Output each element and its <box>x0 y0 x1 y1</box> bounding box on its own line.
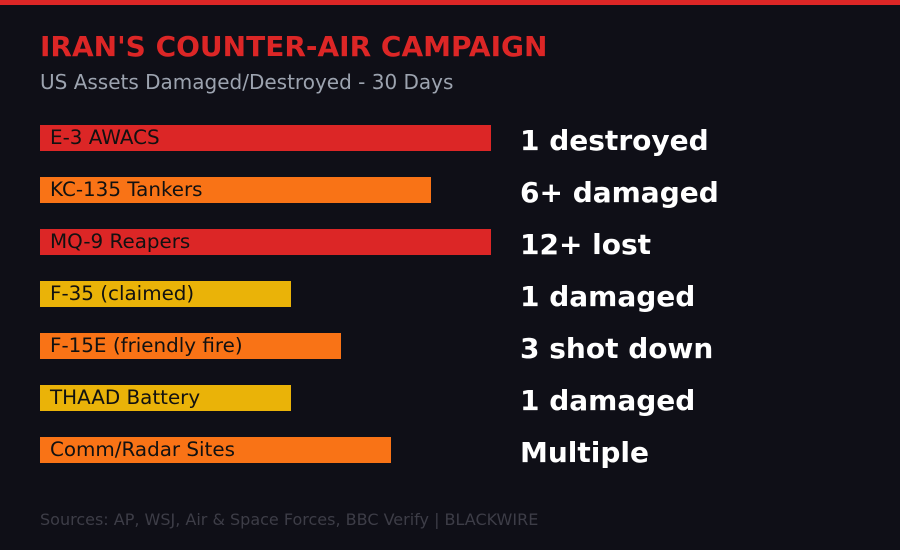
bar: Comm/Radar <box>40 437 391 463</box>
footer sources: Sources: AP, WSJ, Air & Space Forces, BBC Verify | BLACKWIRE <box>40 510 538 529</box>
bar: MQ-9: MQ-9 Reapers <box>50 230 190 253</box>
value: Multiple: Multiple <box>520 436 649 469</box>
bar: MQ-9 <box>40 229 491 255</box>
bar: THAAD <box>40 385 291 411</box>
bar: KC-135 <box>40 177 431 203</box>
value: 1 damaged: 1 damaged <box>520 384 695 417</box>
bar: F-15E <box>40 333 341 359</box>
value: 3 shot down: 3 shot down <box>520 332 713 365</box>
value: 6+ damaged: 6+ damaged <box>520 176 719 209</box>
value: 12+ lost: 12+ lost <box>520 228 651 261</box>
top accent bar <box>0 0 900 5</box>
bar: F-35 <box>40 281 291 307</box>
value: 1 destroyed: 1 destroyed <box>520 124 709 157</box>
bar: F-15E: F-15E (friendly fire) <box>50 334 243 357</box>
subtitle: US Assets Damaged/Destroyed - 30 Days <box>40 70 453 94</box>
bar: F-35: F-35 (claimed) <box>50 282 194 305</box>
bar: THAAD: THAAD Battery <box>50 386 200 409</box>
bar: Comm/Radar: Comm/Radar Sites <box>50 438 235 461</box>
value: 1 damaged: 1 damaged <box>520 280 695 313</box>
bar: E-3 AWACS: E-3 AWACS <box>50 126 160 149</box>
bar: E-3 AWACS <box>40 125 491 151</box>
title: IRAN'S COUNTER-AIR CAMPAIGN <box>40 30 547 63</box>
bar chart <box>40 125 740 470</box>
bar: KC-135: KC-135 Tankers <box>50 178 203 201</box>
